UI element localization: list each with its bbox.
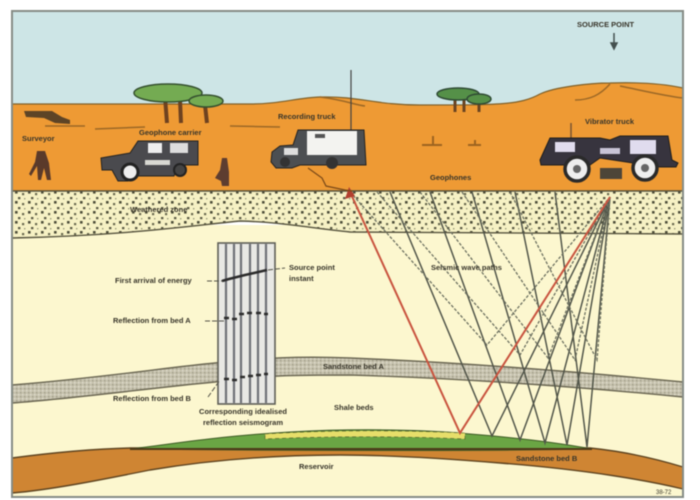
icon: surveyor figure — [29, 151, 51, 180]
seismogram callouts: First arrival of energy — [115, 276, 193, 285]
orange ground with dunes — [12, 83, 683, 191]
sky — [12, 11, 683, 111]
seismogram caption: Corresponding idealised — [199, 407, 287, 416]
distant rocks — [24, 111, 70, 124]
seismogram callouts: Source point — [289, 263, 335, 272]
seismogram callouts: Reflection from bed B — [113, 394, 192, 403]
reservoir lens — [130, 430, 592, 450]
trees centre — [437, 88, 491, 112]
arrow: source point — [611, 33, 617, 49]
cream subsurface — [12, 225, 683, 497]
red arrowhead — [345, 187, 355, 199]
weathered zone — [12, 191, 683, 238]
label: weathered zone: Weathered zone — [130, 205, 187, 214]
sandstone bed A — [12, 357, 683, 403]
seismogram callouts: instant — [289, 274, 314, 283]
label: shale beds: Shale beds — [334, 403, 374, 412]
seismogram caption: reflection seismogram — [203, 418, 283, 427]
vehicle: geophone carrier — [101, 141, 198, 181]
vehicle: vibrator truck — [540, 123, 678, 181]
trees left — [134, 84, 223, 123]
label: seismic wave paths: Seismic wave paths — [431, 263, 502, 272]
label: recording truck: Recording truck — [278, 112, 336, 121]
label: source point: SOURCE POINT — [577, 20, 635, 29]
label: sandstone bed A: Sandstone bed A — [323, 362, 385, 371]
label: geophone carrier: Geophone carrier — [139, 128, 202, 137]
antenna — [350, 70, 352, 165]
seismogram callouts — [113, 263, 335, 403]
vehicle: recording truck — [271, 130, 366, 169]
seismogram — [218, 243, 275, 404]
seismogram callouts: Reflection from bed A — [113, 316, 191, 325]
seismogram caption — [199, 407, 287, 427]
seismic wave paths — [350, 192, 610, 447]
sandstone bed B — [12, 448, 683, 493]
label: vibrator truck: Vibrator truck — [585, 117, 635, 126]
dune ridges — [45, 84, 683, 129]
label: sandstone bed B: Sandstone bed B — [516, 454, 578, 463]
label: reservoir: Reservoir — [299, 462, 334, 471]
red ray path — [350, 192, 610, 433]
geophones on surface — [422, 136, 481, 145]
label: geophones: Geophones — [430, 173, 471, 182]
icon: geophone operator — [215, 158, 229, 186]
label: surveyor: Surveyor — [22, 134, 55, 143]
figure number: 38-72 — [656, 490, 672, 496]
geophone cable — [308, 168, 352, 191]
